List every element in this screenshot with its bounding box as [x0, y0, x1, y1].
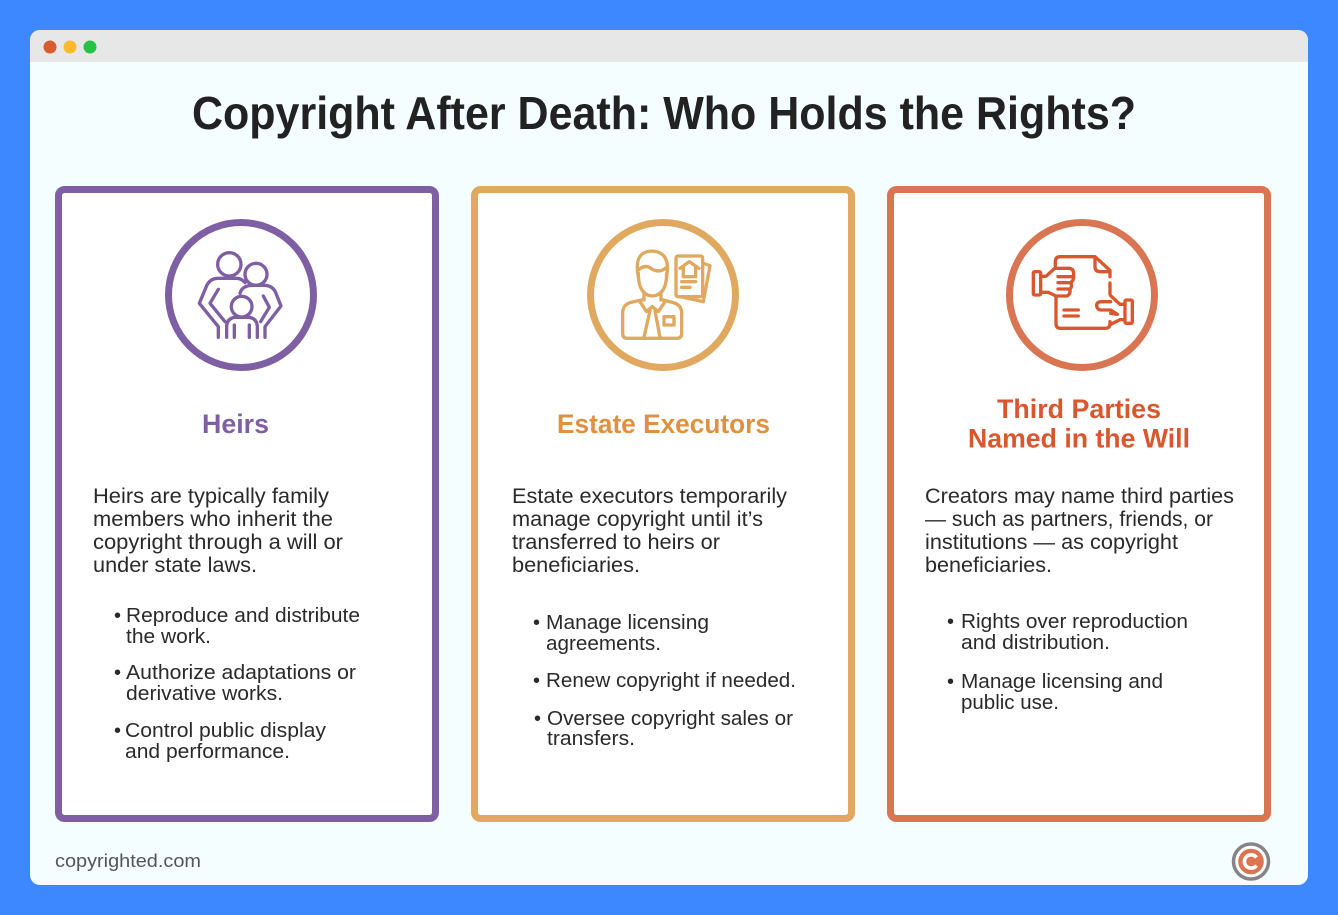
list: third party rights: [947, 611, 1188, 714]
heading: third parties named in the will: [968, 394, 1190, 454]
text block: third parties description: Creators may name third parties: [925, 485, 1234, 508]
text block: executors description: manage copyright until it’s: [512, 508, 763, 531]
list: third party rights: Manage licensing and: [961, 671, 1163, 693]
list: heirs rights: •: [114, 662, 121, 684]
text block: executors description: transferred to heirs or: [512, 531, 720, 554]
list: executor duties: •: [533, 670, 540, 692]
text block: third parties description: — such as partners, friends, or: [925, 508, 1213, 531]
heading: third parties named in the will: Named in the Will: [968, 424, 1190, 454]
list: heirs rights: •: [114, 720, 121, 742]
text block: third parties description: [925, 485, 1234, 577]
list: executor duties: •: [534, 708, 541, 730]
icon: executor with documents: [590, 222, 736, 368]
text block: heirs description: Heirs are typically family: [93, 485, 330, 508]
list: heirs rights: Control public display: [125, 720, 326, 742]
text block: executors description: [512, 485, 788, 577]
list: heirs rights: •: [114, 605, 121, 627]
window title bar: [30, 30, 1308, 62]
list: heirs rights: derivative works.: [126, 683, 283, 705]
list: executor duties: [533, 612, 796, 750]
list: third party rights: public use.: [961, 692, 1059, 714]
title: Copyright After Death: Who Holds the Rights?: [192, 87, 1136, 139]
text block: heirs description: members who inherit the: [93, 508, 333, 531]
footer source text: copyrighted.com: [55, 850, 201, 871]
list: third party rights: •: [947, 611, 954, 633]
icon: copyright logo: [1234, 844, 1268, 879]
list: third party rights: Rights over reproduction: [961, 611, 1188, 633]
heading: heirs: Heirs: [202, 409, 269, 439]
panel: heirs: [58, 190, 436, 818]
list: heirs rights: Reproduce and distribute: [126, 605, 360, 627]
list: third party rights: •: [947, 671, 954, 693]
panel: third parties: [890, 190, 1268, 818]
list: heirs rights: and performance.: [125, 741, 290, 763]
list: executor duties: transfers.: [547, 728, 635, 750]
list: third party rights: and distribution.: [961, 632, 1110, 654]
text block: third parties description: institutions — as copyright: [925, 531, 1178, 554]
list: executor duties: •: [533, 612, 540, 634]
icon: family: [168, 222, 314, 368]
heading: estate executors: Estate Executors: [557, 409, 770, 439]
panel: estate executors: [474, 190, 852, 818]
list: executor duties: Renew copyright if needed.: [546, 670, 796, 692]
text block: executors description: beneficiaries.: [512, 554, 640, 577]
list: heirs rights: Authorize adaptations or: [126, 662, 356, 684]
text block: heirs description: under state laws.: [93, 554, 257, 577]
list: executor duties: agreements.: [546, 633, 661, 655]
window control dots: [44, 40, 96, 54]
text block: third parties description: beneficiaries.: [925, 554, 1052, 577]
list: heirs rights: the work.: [126, 626, 211, 648]
list: executor duties: Oversee copyright sales or: [547, 708, 793, 730]
text block: heirs description: copyright through a will or: [93, 531, 343, 554]
heading: third parties named in the will: Third Parties: [997, 394, 1161, 424]
list: executor duties: Manage licensing: [546, 612, 709, 634]
list: heirs rights: [114, 605, 360, 763]
text block: heirs description: [93, 485, 343, 577]
icon: hands passing document: [1010, 222, 1154, 368]
text block: executors description: Estate executors temporarily: [512, 485, 788, 508]
